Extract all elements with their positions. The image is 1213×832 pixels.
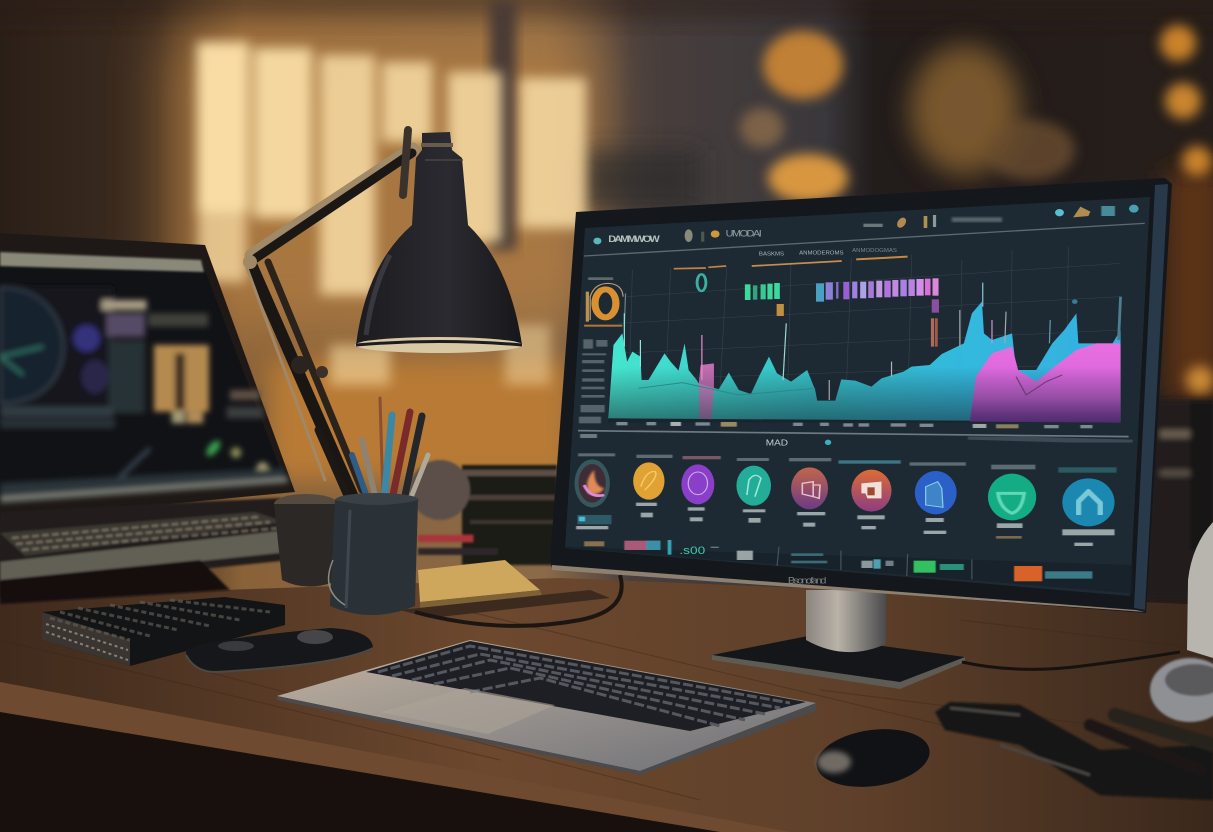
desk lamp: [243, 130, 523, 495]
desktop monitor: [550, 178, 1172, 613]
monitor cable: [415, 575, 622, 626]
keys: [378, 646, 790, 726]
icon: orange circle: [851, 470, 892, 512]
chart legend bars: ANMODOGMAS: [852, 248, 897, 254]
pens: [318, 398, 428, 500]
chart spikes: [624, 283, 1121, 400]
bottom status strip: [562, 540, 1133, 593]
back stack of books and papers: [410, 460, 557, 565]
laptop screen content: [0, 287, 288, 503]
icon: green circle: [988, 474, 1036, 520]
laptop keyboard deck: [0, 498, 295, 604]
teal area series: [608, 302, 1121, 422]
icon: purple circle: [681, 464, 714, 504]
monitor stand: [712, 590, 1180, 689]
tools on the right of the desk: [935, 702, 1213, 800]
stand base: [712, 636, 965, 688]
bright window panes: [197, 42, 586, 385]
lamp shade: [355, 132, 523, 353]
header bar: UMODAI: [726, 229, 762, 239]
grid lines: [618, 247, 1121, 413]
header bar: DAMMWOW: [608, 235, 660, 245]
tape roll: [1150, 658, 1213, 722]
upper chart content: [578, 205, 1145, 437]
power cable: [962, 652, 1180, 669]
x axis labels: [616, 422, 1092, 428]
icon: ring gauge: [575, 459, 610, 507]
icon: cyan circle: [1062, 478, 1115, 526]
lamp arms: [243, 130, 412, 495]
mouse: [813, 722, 933, 794]
monitor brand label: Bsonofand: [788, 576, 826, 586]
wooden desk top: [0, 578, 1213, 832]
header bar: [578, 205, 1145, 437]
divider label: [580, 434, 1133, 447]
divider label: MAD: [766, 438, 788, 447]
icon: rose circle: [791, 467, 828, 509]
green bars: [745, 283, 780, 300]
monitor bezel: [550, 178, 1172, 613]
pink area series: [970, 343, 1121, 423]
orange donut gauge: [584, 277, 626, 327]
icon: blue circle: [915, 471, 957, 514]
cup body: [329, 493, 419, 615]
icon: gold coin: [633, 462, 665, 500]
white bottle: [1187, 522, 1213, 658]
pen holder with pens: [318, 398, 428, 615]
icon: teal circle: [736, 466, 771, 506]
chart legend bars: BASKMS: [759, 252, 784, 257]
laptop lid and screen: [0, 233, 295, 520]
desk remote: [186, 628, 373, 672]
silver keyboard: [277, 640, 816, 775]
yellow sticky notes: [400, 560, 610, 618]
monitor screen: [565, 197, 1150, 596]
chart legend bars: [674, 248, 908, 291]
laptop on the left: [0, 233, 295, 604]
stand neck: [806, 590, 886, 652]
orange background bokeh: [740, 25, 1213, 394]
calculator: [42, 597, 285, 666]
chart legend bars: ANMODEROMS: [799, 251, 844, 256]
purple bars: [777, 278, 939, 347]
icon captions top: [578, 453, 1117, 473]
bottom status strip: .s00: [679, 544, 705, 557]
small dark cup: [274, 494, 338, 587]
icon captions bottom: [576, 503, 1115, 546]
lower icon row: [562, 434, 1133, 593]
background shelves right of monitor: [1150, 400, 1213, 600]
side list: [579, 339, 607, 423]
